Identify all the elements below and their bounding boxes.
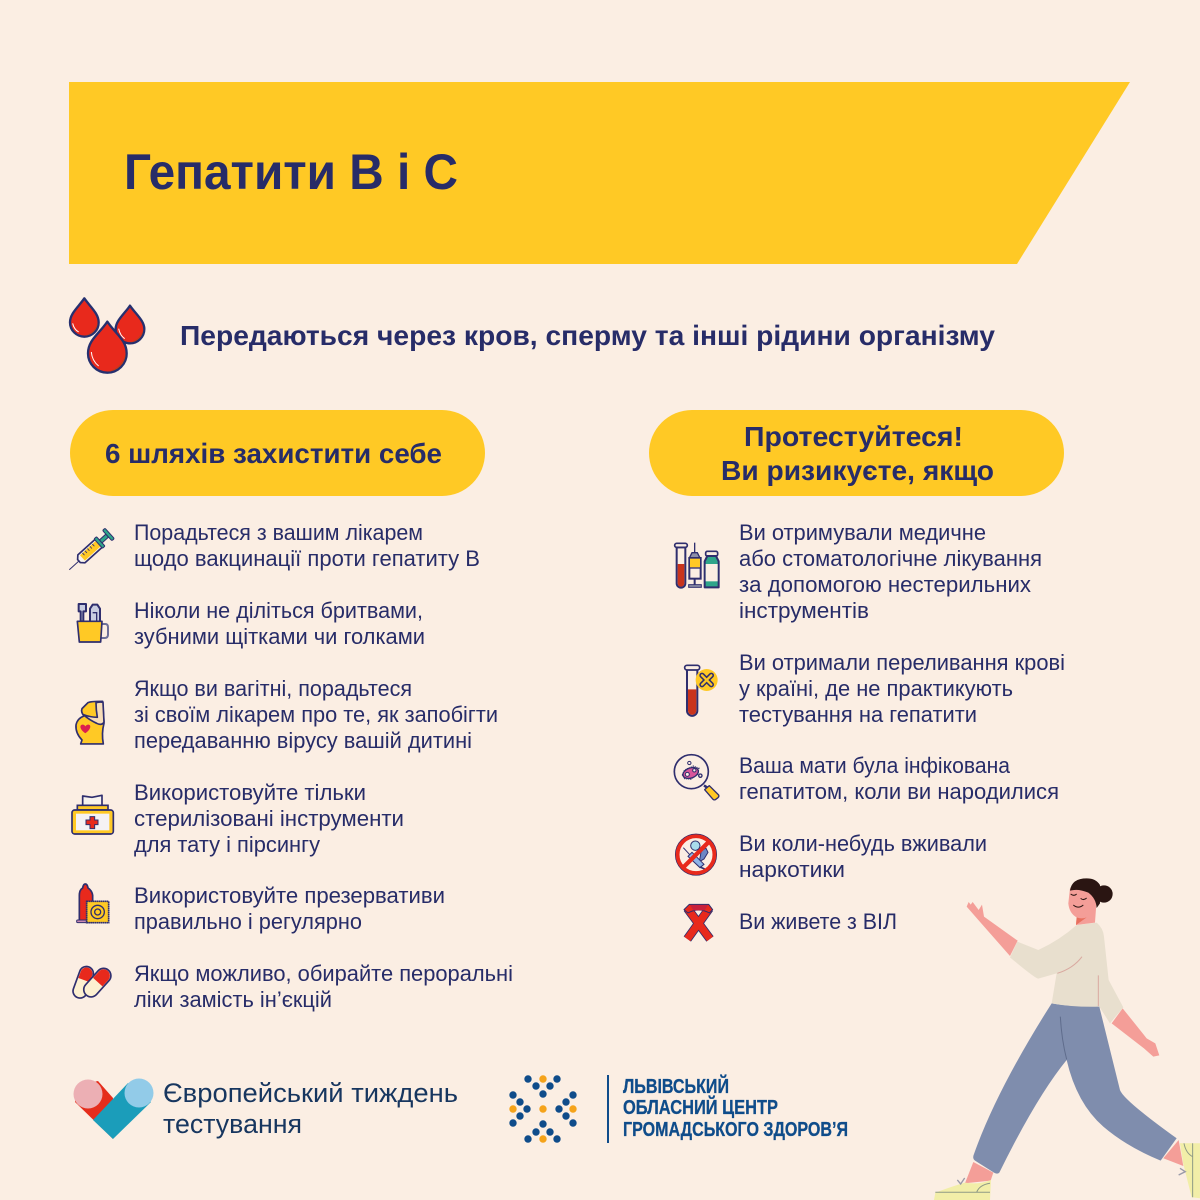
- text: blood transfusion risk: у країні, де не практикують: [739, 676, 1013, 701]
- text: vaccination advice: щодо вакцинації проти гепатиту В: [134, 546, 480, 571]
- icon: syringe: [65, 528, 114, 575]
- title: Гепатити В і С: [124, 144, 458, 200]
- text: vaccination advice: [134, 520, 480, 571]
- icon: condom: [77, 884, 109, 923]
- text: razors advice: [134, 598, 425, 649]
- icon: test tube, syringe and vial: [675, 543, 719, 588]
- text: condoms advice: Використовуйте презервативи: [134, 883, 445, 908]
- text: pregnancy advice: передаванню вірусу вашій дитині: [134, 728, 472, 753]
- text: blood transfusion risk: [739, 650, 1065, 727]
- text: oral medicines advice: [134, 961, 513, 1012]
- icon: no drugs sign: [675, 834, 717, 875]
- text: oral medicines advice: Якщо можливо, обирайте пероральні: [134, 961, 513, 986]
- text: non-sterile treatment risk: або стоматологічне лікування: [739, 546, 1042, 571]
- logo: European testing week: Європейський тиждень: [163, 1078, 458, 1108]
- logo: Lviv regional public health center: [509, 1074, 848, 1143]
- logo: Lviv regional public health center: ЛЬВІВСЬКИЙ: [623, 1074, 729, 1098]
- title banner: [69, 82, 1130, 264]
- pill: get tested: [649, 410, 1064, 496]
- text: sterile instruments advice: для тату і пірсингу: [134, 832, 320, 857]
- text: razors advice: Ніколи не діліться бритвами,: [134, 598, 423, 623]
- pill: 6 ways to protect: [70, 410, 485, 496]
- text: pregnancy advice: Якщо ви вагітні, порадьтеся: [134, 676, 412, 701]
- icon: blood tube with cross: [685, 665, 718, 716]
- text: drug use risk: наркотики: [739, 857, 845, 882]
- text: condoms advice: [134, 883, 445, 934]
- text: non-sterile treatment risk: інструментів: [739, 598, 869, 623]
- text: non-sterile treatment risk: [739, 520, 1042, 623]
- pill: get tested: Ви ризикуєте, якщо: [721, 455, 994, 486]
- text: infected mother risk: [739, 753, 1059, 804]
- text: infected mother risk: Ваша мати була інфікована: [739, 753, 1011, 778]
- text: pregnancy advice: зі своїм лікарем про те, як запобігти: [134, 702, 498, 727]
- icon: magnifier with virus: [674, 755, 719, 800]
- logo: European testing week: [74, 1078, 458, 1139]
- icon: red ribbon: [684, 904, 713, 939]
- text: sterile instruments advice: [134, 780, 404, 857]
- text: non-sterile treatment risk: Ви отримували медичне: [739, 520, 986, 545]
- text: drug use risk: [739, 831, 987, 882]
- logo: Lviv regional public health center: ОБЛАСНИЙ ЦЕНТР: [623, 1095, 778, 1119]
- text: infected mother risk: гепатитом, коли ви народилися: [739, 779, 1059, 804]
- text: sterile instruments advice: стерилізовані інструменти: [134, 806, 404, 831]
- icon: pregnant woman: [76, 701, 104, 744]
- icon: cup with toothbrush: [77, 604, 108, 642]
- text: condoms advice: правильно і регулярно: [134, 909, 362, 934]
- text: oral medicines advice: ліки замість ін’єкцій: [134, 987, 332, 1012]
- logo: European testing week: тестування: [163, 1109, 302, 1139]
- icon: blood drops: [70, 298, 144, 373]
- pill: 6 ways to protect: 6 шляхів захистити себе: [105, 438, 442, 469]
- text: blood transfusion risk: тестування на гепатити: [739, 702, 977, 727]
- text: pregnancy advice: [134, 676, 498, 753]
- text: HIV risk: Ви живете з ВІЛ: [739, 909, 897, 934]
- illustration: walking woman: [934, 878, 1200, 1200]
- text: razors advice: зубними щітками чи голками: [134, 624, 425, 649]
- text: non-sterile treatment risk: за допомогою нестерильних: [739, 572, 1031, 597]
- text: sterile instruments advice: Використовуйте тільки: [134, 780, 366, 805]
- logo: Lviv regional public health center: ГРОМАДСЬКОГО ЗДОРОВ’Я: [623, 1119, 848, 1141]
- icon: first aid kit: [72, 795, 113, 834]
- pill: get tested: Протестуйтеся!: [744, 421, 963, 452]
- subheading: transmission: Передаються через кров, сперму та інші рідини організму: [180, 320, 995, 351]
- icon: pills: [71, 965, 114, 1000]
- text: vaccination advice: Порадьтеся з вашим лікарем: [134, 520, 423, 545]
- text: drug use risk: Ви коли-небудь вживали: [739, 831, 987, 856]
- text: blood transfusion risk: Ви отримали переливання крові: [739, 650, 1065, 675]
